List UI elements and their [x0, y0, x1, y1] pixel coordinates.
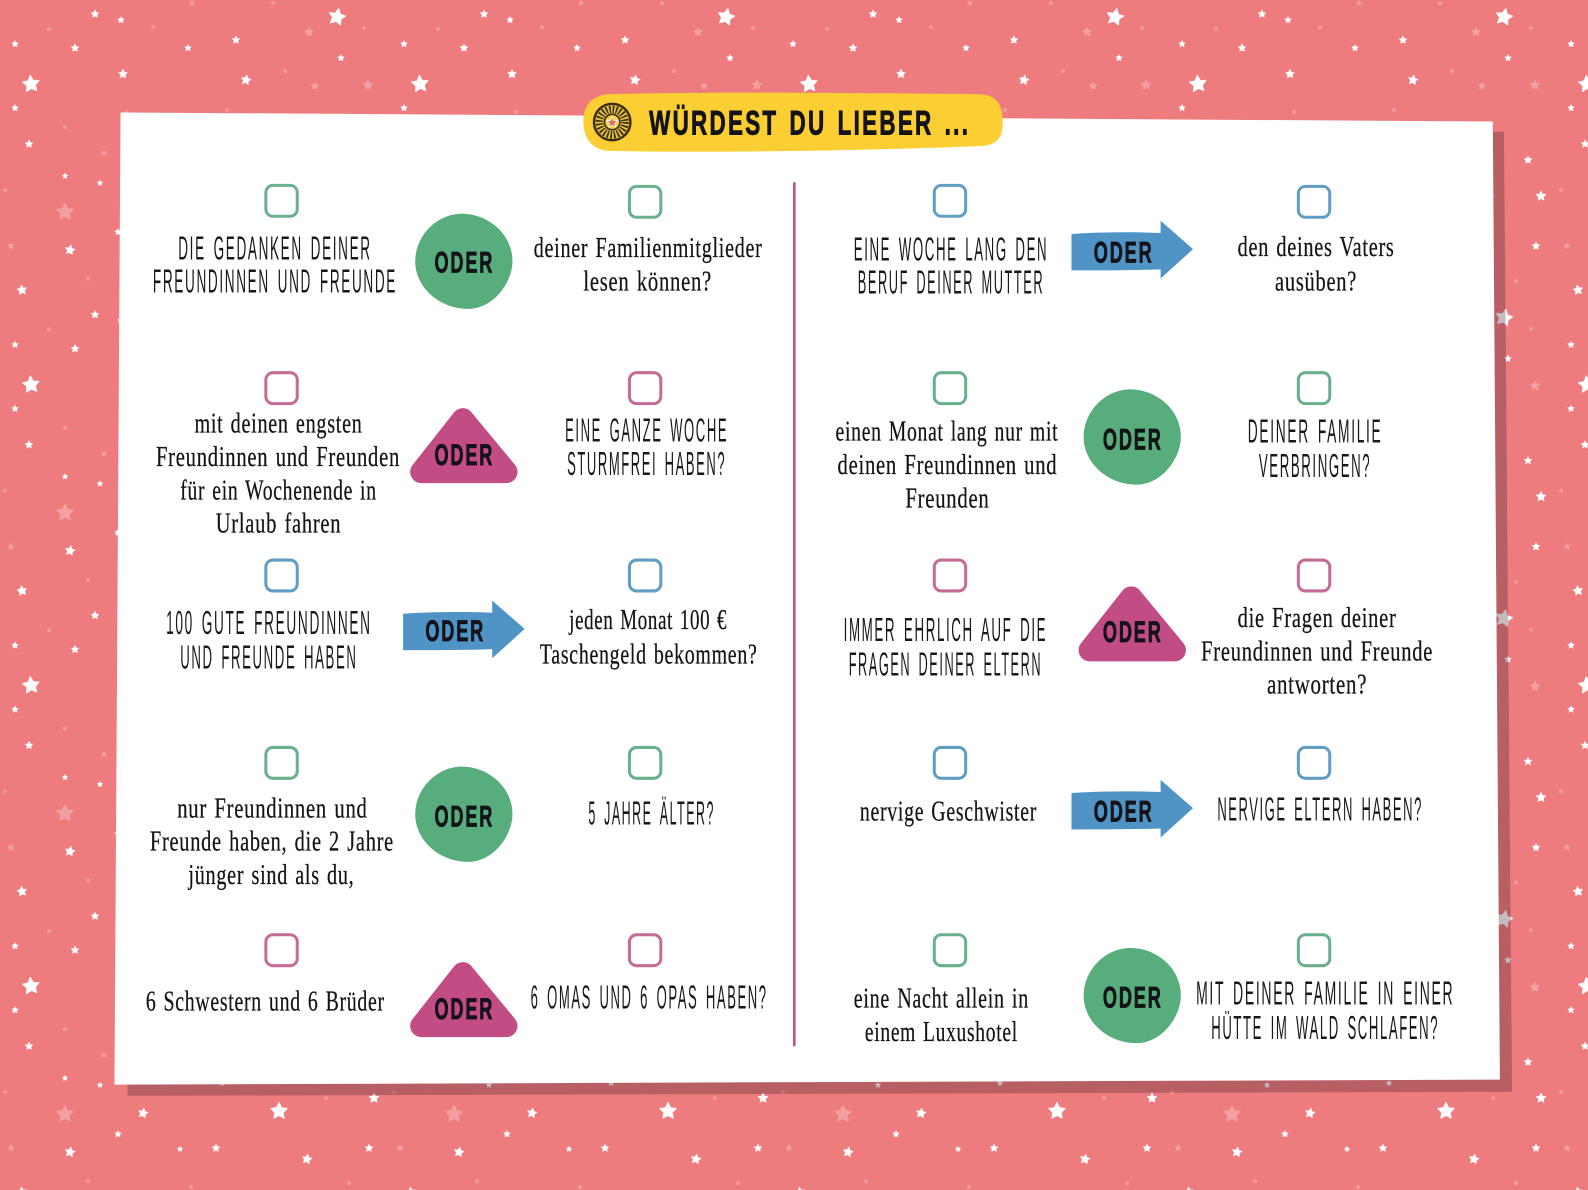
question 8 [844, 560, 1433, 701]
panel shadow [128, 132, 1512, 1096]
text: DEINER FAMILIE [1248, 414, 1382, 451]
oder badge: green blob: ODER [434, 246, 494, 279]
checkbox left [934, 935, 966, 966]
checkbox right [629, 935, 661, 966]
option left: Freunden [905, 483, 989, 514]
option right: Freundinnen und Freunde [1201, 636, 1433, 667]
oder badge: pink triangle [421, 419, 506, 472]
divider line [793, 182, 796, 1046]
oder badge: pink triangle [421, 973, 506, 1026]
question 6: BERUF DEINER MUTTER [858, 265, 1044, 302]
checkbox left [266, 935, 297, 966]
option right [540, 605, 758, 670]
oder badge: pink triangle [1090, 598, 1175, 650]
option right [1238, 232, 1395, 298]
option left [150, 793, 394, 891]
icon: round emblem with star [594, 104, 630, 140]
option left: Urlaub fahren [216, 509, 341, 540]
checkbox left [934, 185, 966, 216]
question 1: DIE GEDANKEN DEINER [178, 230, 372, 267]
option right: ausüben? [1275, 267, 1357, 298]
oder badge: blue arrow: ODER [425, 615, 485, 648]
option right [565, 413, 728, 483]
oder badge: green blob: ODER [434, 800, 494, 833]
option right: die Fragen deiner [1238, 603, 1397, 634]
question 6 [854, 185, 1395, 302]
checkbox left [266, 747, 297, 778]
oder badge: blue arrow [1071, 780, 1193, 838]
question 10 [854, 935, 1454, 1048]
checkbox left [266, 560, 297, 591]
checkbox left [934, 560, 966, 591]
option left [153, 230, 397, 301]
text: EINE GANZE WOCHE [565, 413, 728, 450]
text: STURMFREI HABEN? [567, 446, 726, 483]
option left: eine Nacht allein in [854, 984, 1029, 1015]
oder badge: green blob [1084, 948, 1181, 1043]
option right: Taschengeld bekommen? [540, 639, 758, 670]
option left [844, 612, 1047, 684]
option left: einen Monat lang nur mit [836, 417, 1058, 448]
checkbox left [266, 373, 297, 404]
checkbox right [1298, 935, 1330, 966]
question 1: FREUNDINNEN UND FREUNDE [153, 264, 397, 301]
option left [836, 417, 1058, 514]
oder badge: green blob [415, 767, 512, 862]
question 3: UND FREUNDE HABEN [180, 639, 358, 676]
option left: deinen Freundinnen und [838, 450, 1057, 481]
question 4 [150, 747, 715, 891]
option left: nervige Geschwister [860, 796, 1037, 827]
heading: WÜRDEST DU LIEBER ... [649, 104, 970, 143]
checkbox right [629, 186, 661, 217]
question 9 [860, 747, 1423, 838]
question 1 [153, 185, 763, 309]
option left: Freunde haben, die 2 Jahre [150, 827, 394, 858]
option left [854, 984, 1029, 1048]
option right: jeden Monat 100 € [569, 605, 727, 636]
question 6: EINE WOCHE LANG DEN [854, 231, 1048, 268]
checkbox left [934, 373, 966, 404]
oder badge: pink triangle: ODER [434, 439, 494, 472]
question 5 [146, 935, 768, 1026]
oder badge: green blob: ODER [1103, 982, 1163, 1015]
checkbox right [1298, 747, 1330, 778]
text: 6 OMAS UND 6 OPAS HABEN? [531, 980, 768, 1017]
checkbox right [1298, 560, 1330, 591]
oder badge: blue arrow: ODER [1094, 795, 1154, 828]
checkbox left [934, 747, 966, 778]
text: 5 JAHRE ÄLTER? [588, 795, 715, 832]
question 3 [166, 560, 758, 676]
option left [156, 408, 400, 540]
option left: einem Luxushotel [865, 1017, 1018, 1048]
oder badge: blue arrow [403, 601, 525, 658]
option right: antworten? [1267, 670, 1367, 701]
option left: nur Freundinnen und [177, 793, 368, 824]
option right [1196, 976, 1454, 1047]
option left: Freundinnen und Freunden [156, 442, 400, 473]
question 8: FRAGEN DEINER ELTERN [849, 647, 1042, 684]
oder badge: blue arrow [1071, 221, 1193, 279]
checkbox right [1298, 373, 1330, 404]
option left: mit deinen engsten [194, 408, 363, 439]
question 7 [836, 373, 1382, 514]
panel: white sheet [114, 112, 1500, 1085]
question 2 [156, 373, 728, 540]
option left: für ein Wochenende in [180, 475, 377, 506]
checkbox right [629, 373, 661, 404]
option right [1201, 603, 1433, 701]
banner shape [583, 93, 1003, 152]
question 3: 100 GUTE FREUNDINNEN [166, 605, 372, 642]
oder badge: green blob: ODER [1103, 424, 1163, 457]
option right: den deines Vaters [1238, 232, 1395, 263]
text: VERBRINGEN? [1259, 448, 1371, 485]
title banner [583, 93, 1003, 152]
option left: 6 Schwestern und 6 Brüder [146, 987, 385, 1018]
option right [534, 233, 763, 298]
option right: lesen können? [583, 267, 712, 298]
checkbox left [266, 185, 297, 216]
option left [854, 231, 1048, 302]
oder badge: pink triangle: ODER [1103, 616, 1163, 649]
option right [1248, 414, 1382, 485]
checkbox right [1298, 186, 1330, 217]
oder badge: green blob [415, 214, 512, 309]
option left: jünger sind als du, [188, 860, 354, 891]
oder badge: pink triangle: ODER [434, 993, 494, 1026]
checkbox right [629, 560, 661, 591]
checkbox right [629, 747, 661, 778]
question 8: IMMER EHRLICH AUF DIE [844, 612, 1047, 649]
oder badge: blue arrow: ODER [1094, 236, 1154, 269]
option right: deiner Familienmitglieder [534, 233, 763, 264]
option left [166, 605, 372, 676]
oder badge: green blob [1084, 389, 1181, 485]
